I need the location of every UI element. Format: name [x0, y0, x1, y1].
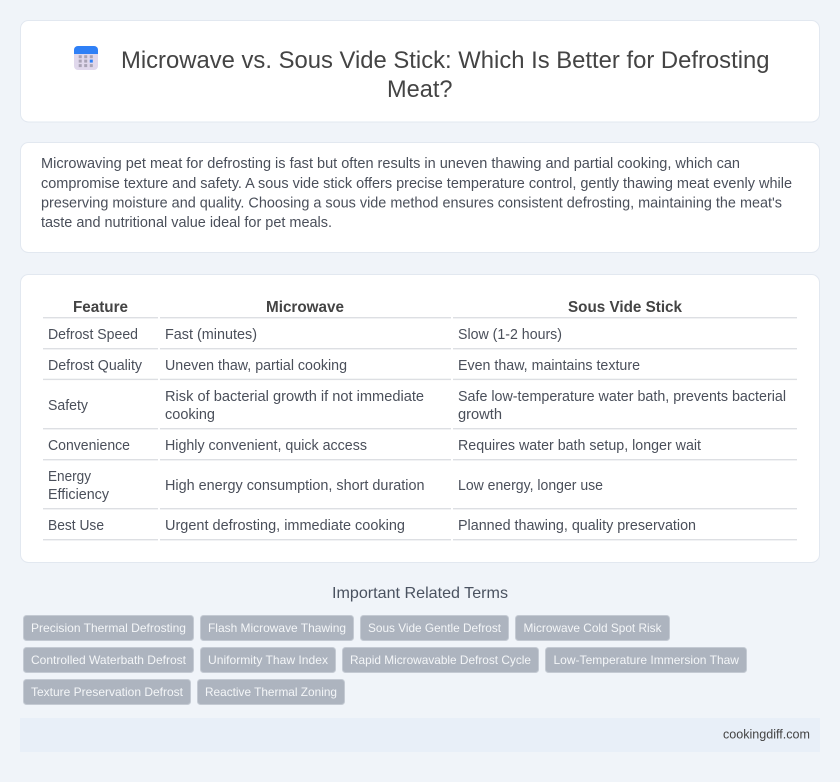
row: defrost speed: Defrost Speed: [48, 327, 138, 343]
panel: title header: [20, 20, 820, 122]
table header row: [43, 299, 797, 318]
tag: flash microwave thawing: Flash Microwave Thawing: [208, 621, 346, 635]
table header row: Feature: [73, 299, 128, 316]
table header row: Microwave: [266, 299, 344, 316]
row: best use: Planned thawing, quality preservation: [458, 518, 696, 534]
intro text block: Microwaving pet meat for defrosting is fast but often results in uneven thawing and partial cooking, which can: [41, 156, 740, 172]
row: safety: Safety: [48, 398, 89, 414]
tag: precision thermal defrosting: [24, 616, 194, 640]
footer source text: cookingdiff.com: [723, 728, 810, 742]
tag: microwave cold spot risk: [516, 616, 670, 640]
row: defrost quality: [43, 358, 797, 380]
intro text block: taste and nutritional value ideal for pet meals.: [41, 215, 332, 231]
row: convenience: Highly convenient, quick access: [165, 438, 367, 454]
row: defrost quality: Defrost Quality: [48, 358, 143, 374]
panel: introduction: [20, 142, 820, 252]
row: safety: cooking: [165, 407, 215, 423]
tag: reactive thermal zoning: Reactive Thermal Zoning: [205, 685, 337, 699]
row: defrost speed: Fast (minutes): [165, 327, 257, 343]
row: best use: Urgent defrosting, immediate cooking: [165, 518, 405, 534]
tag: texture preservation defrost: Texture Preservation Defrost: [31, 685, 184, 699]
row: energy efficiency: High energy consumption, short duration: [165, 478, 424, 494]
tag: sous vide gentle defrost: [360, 616, 508, 640]
intro text block: [41, 156, 792, 231]
heading: important related terms: Important Related Terms: [332, 585, 508, 602]
table header row: Sous Vide Stick: [568, 299, 682, 316]
row: energy efficiency: Energy: [48, 469, 92, 485]
icon: calendar: [74, 46, 98, 70]
row: energy efficiency: [43, 469, 797, 509]
row: defrost speed: Slow (1-2 hours): [458, 327, 562, 343]
tag: rapid microwavable defrost cycle: [342, 648, 538, 672]
row: safety: Risk of bacterial growth if not immediate: [165, 389, 424, 405]
row: convenience: [43, 438, 797, 460]
tag: precision thermal defrosting: Precision Thermal Defrosting: [31, 621, 186, 635]
tag: low-temperature immersion thaw: [546, 648, 746, 672]
tag: controlled waterbath defrost: [24, 648, 194, 672]
title: Microwave vs. Sous Vide Stick: Which Is Better for Defrosting: [121, 47, 770, 74]
row: best use: [43, 518, 797, 540]
row: best use: Best Use: [48, 518, 104, 534]
tag: sous vide gentle defrost: Sous Vide Gentle Defrost: [368, 621, 502, 635]
row: safety: Safe low-temperature water bath, prevents bacterial: [458, 389, 786, 405]
row: safety: [43, 389, 797, 429]
row: energy efficiency: Low energy, longer use: [458, 478, 603, 494]
tag: uniformity thaw index: [200, 648, 336, 672]
tag: texture preservation defrost: [24, 680, 190, 704]
related terms tags: [24, 616, 746, 704]
tag: uniformity thaw index: Uniformity Thaw Index: [208, 653, 328, 667]
row: energy efficiency: Efficiency: [48, 487, 110, 503]
row: convenience: Requires water bath setup, longer wait: [458, 438, 701, 454]
intro text block: compromise texture and safety. A sous vide stick offers precise temperature control, gently thawing meat evenly while: [41, 176, 792, 192]
tag: flash microwave thawing: [200, 616, 354, 640]
tag: low-temperature immersion thaw: Low-Temperature Immersion Thaw: [554, 653, 739, 667]
tag: microwave cold spot risk: Microwave Cold Spot Risk: [524, 621, 662, 635]
row: defrost quality: Uneven thaw, partial cooking: [165, 358, 347, 374]
intro text block: preserving moisture and quality. Choosing a sous vide method ensures consistent defrosting, maintaining the meat's: [41, 196, 782, 212]
row: defrost quality: Even thaw, maintains texture: [458, 358, 640, 374]
panel: comparison table: [20, 274, 820, 562]
row: defrost speed: [43, 327, 797, 349]
footer bar: [20, 718, 820, 752]
title: [121, 47, 770, 103]
tag: reactive thermal zoning: [198, 680, 344, 704]
title: Meat?: [387, 76, 452, 103]
row: safety: growth: [458, 407, 502, 423]
row: convenience: Convenience: [48, 438, 130, 454]
tag: controlled waterbath defrost: Controlled Waterbath Defrost: [31, 653, 187, 667]
tag: rapid microwavable defrost cycle: Rapid Microwavable Defrost Cycle: [350, 653, 531, 667]
